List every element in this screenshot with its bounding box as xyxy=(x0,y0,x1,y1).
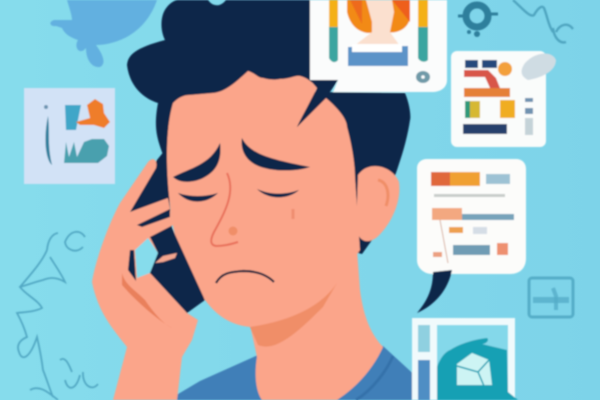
eyebrows and eyes xyxy=(173,138,310,202)
hair back xyxy=(127,0,410,254)
shirt xyxy=(168,346,425,400)
panel: top speech card with portrait xyxy=(310,0,447,92)
phone xyxy=(128,150,205,313)
panel: right chart card xyxy=(451,51,556,147)
neck xyxy=(250,250,383,400)
nose and mouth xyxy=(211,173,293,283)
doodle: handwriting squiggle left xyxy=(17,232,98,400)
face xyxy=(167,71,360,327)
panel: bottom teal card xyxy=(412,318,518,400)
doodle: faint chart icon xyxy=(529,278,573,317)
doodle: squiggle top right xyxy=(513,0,573,42)
phone details and fingers xyxy=(122,209,204,328)
icon: blue bird silhouette xyxy=(50,0,157,67)
panel: right speech card with list xyxy=(417,159,526,313)
jaw shadow xyxy=(250,283,337,347)
hand and arm xyxy=(92,159,198,400)
icon: gear ring xyxy=(458,5,498,37)
panel: left photo card xyxy=(24,88,115,184)
hair spike xyxy=(297,80,338,127)
ear xyxy=(356,166,399,241)
